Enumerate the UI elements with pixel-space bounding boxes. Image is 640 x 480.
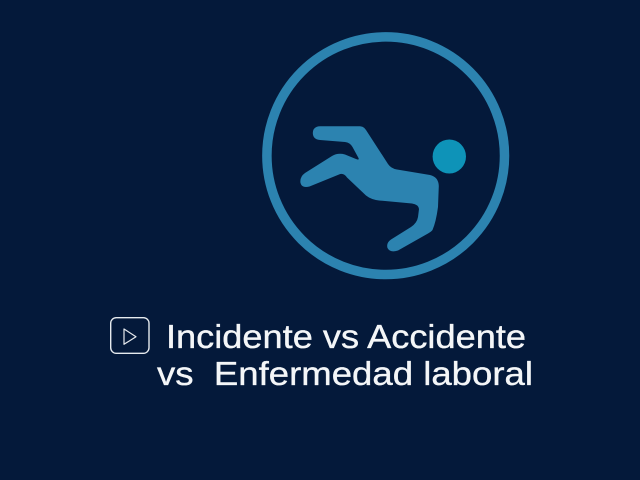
title: vs Enfermedad laboral: [157, 355, 533, 392]
falling person head: [433, 140, 466, 174]
icon: play button: [111, 318, 149, 353]
icon: falling person in circle: [267, 37, 505, 274]
title: Incidente vs Accidente: [166, 318, 526, 355]
title: [157, 318, 533, 392]
falling person body: [300, 126, 439, 251]
icon ring: [267, 37, 505, 274]
